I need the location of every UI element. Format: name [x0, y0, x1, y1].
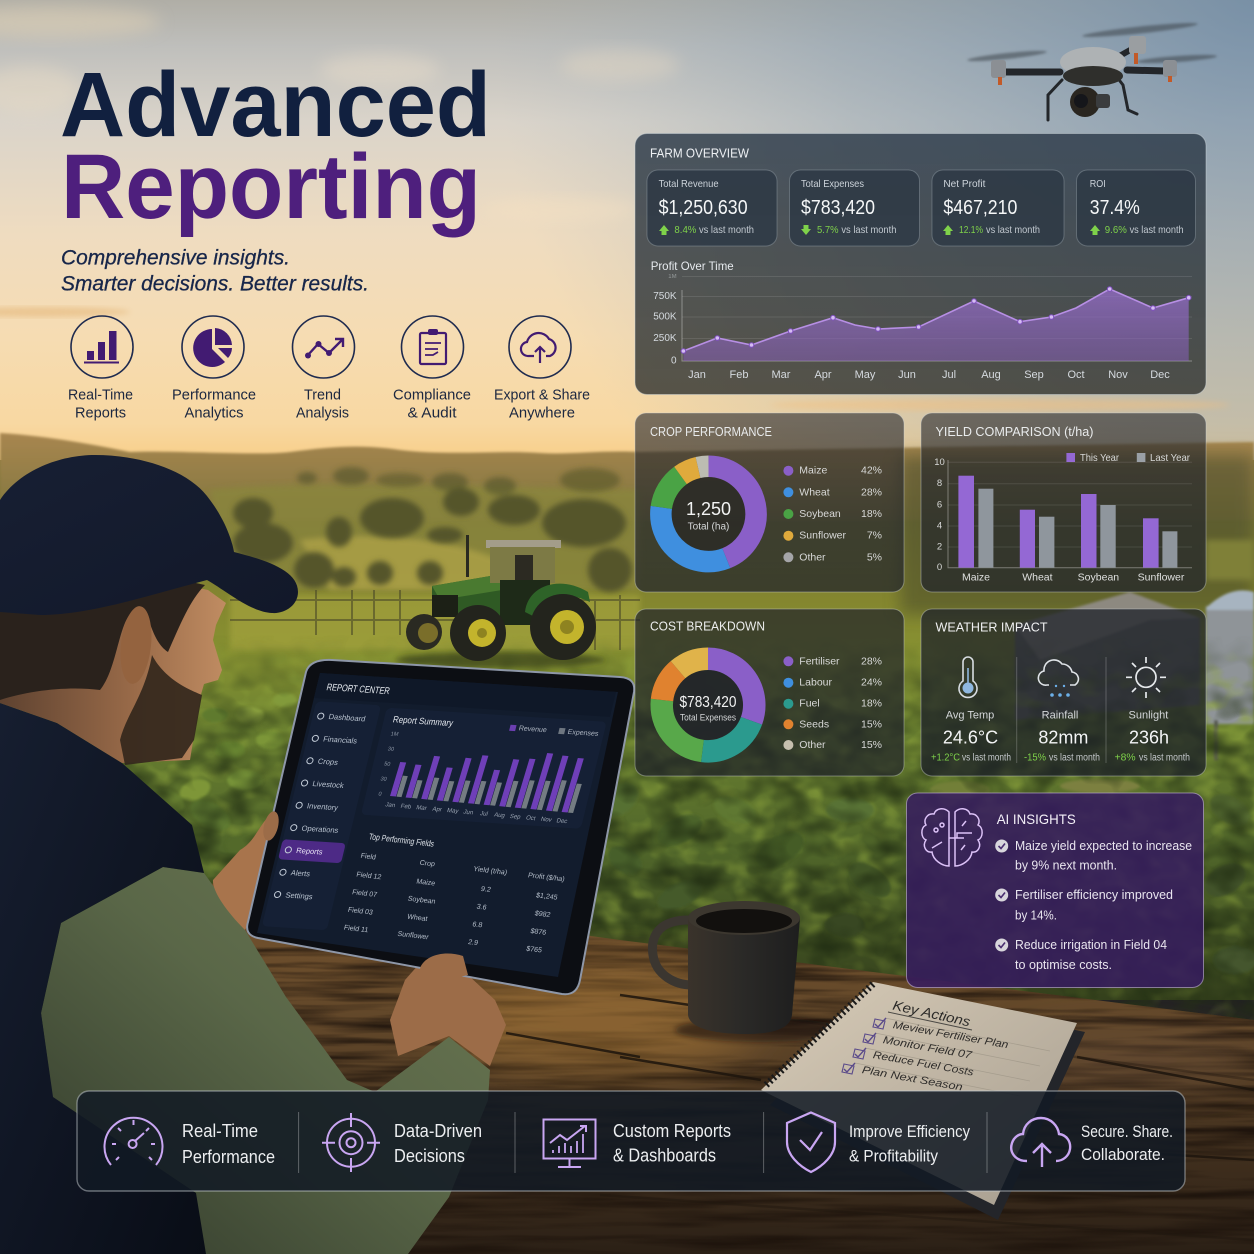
weather: rainfall: 82mm: [1038, 728, 1088, 748]
kpi: net profit: 12.1%: [959, 224, 983, 236]
kpi: total expenses: vs last month: [841, 224, 897, 236]
insight: maize yield: by 9% next month.: [1015, 858, 1117, 872]
yield bar chart: 8: [937, 478, 942, 489]
tablet: fingers over screen: [261, 810, 468, 985]
tablet: top performing fields table: $876: [530, 927, 547, 937]
drone: [967, 20, 1217, 120]
profit over time line chart: Mar: [772, 369, 791, 381]
yield legend: Last Year: [1150, 452, 1190, 464]
tablet: revenue and expenses bar chart: Jan: [384, 801, 397, 809]
benefit: custom reports and dashboards: Custom Reports: [613, 1121, 731, 1141]
panel: bottom benefits bar: [77, 1091, 1185, 1191]
kpi: total expenses: Total Expenses: [801, 178, 864, 190]
weather: sunlight: [1115, 710, 1190, 764]
profit over time line chart: Jan: [688, 369, 706, 381]
insight: reduce irrigation: to optimise costs.: [1015, 958, 1112, 972]
weather: avg temp: +1.2°C: [931, 752, 960, 764]
cost legend: Fertiliser: [799, 655, 840, 667]
kpi: total revenue: [647, 170, 777, 246]
crop legend: Soybean: [799, 508, 841, 520]
tablet: sidebar and header: 50: [383, 761, 391, 768]
yield bar chart: 0: [937, 562, 942, 573]
tablet: top performing fields table: Yield (t/ha): [473, 865, 508, 877]
kpi: total revenue: Total Revenue: [659, 178, 719, 190]
insight: maize yield: Maize yield expected to increase: [1015, 839, 1192, 853]
cost legend: [783, 655, 882, 751]
kpi: total expenses: [790, 170, 920, 246]
feature: export and share: [494, 316, 590, 422]
crop legend: Maize: [799, 465, 827, 477]
tablet: revenue and expenses bar chart: Jul: [479, 810, 489, 818]
panel: crop performance: CROP PERFORMANCE: [650, 424, 772, 439]
weather: avg temp: Avg Temp: [946, 710, 994, 722]
profit over time line chart: Feb: [730, 369, 748, 381]
panel: ai insights: [906, 793, 1204, 988]
panel: crop performance: [635, 413, 904, 592]
feature: export and share: Anywhere: [509, 404, 575, 422]
feature: real-time reports: [68, 316, 133, 422]
tablet: sidebar and header: Revenue: [518, 724, 548, 734]
tablet: top performing fields table: Maize: [416, 877, 436, 888]
background: distant hills and fields: [0, 433, 1254, 1000]
weather: avg temp: [931, 710, 1011, 764]
tablet: top performing fields table: Field 07: [351, 888, 378, 899]
title: Reporting: [61, 136, 481, 238]
weather: rainfall: -15%: [1024, 752, 1046, 764]
benefit: real-time performance: [104, 1118, 275, 1167]
farmer: baseball cap: [0, 455, 298, 615]
yield legend: [1066, 452, 1190, 464]
tablet: top performing fields table: Wheat: [406, 913, 428, 923]
yield bar chart: Soybean: [1078, 572, 1119, 584]
tablet: sidebar and header: Expenses: [567, 728, 600, 738]
tablet: top performing fields table: Field 11: [343, 924, 369, 934]
tablet: revenue and expenses bar chart: Oct: [525, 814, 537, 822]
benefit: data-driven decisions: [322, 1113, 482, 1172]
tablet: revenue and expenses bar chart: Nov: [540, 816, 554, 824]
farmer: left hand: [213, 812, 282, 930]
tablet: revenue and expenses bar chart: Jun: [462, 809, 475, 816]
tablet: report center title: REPORT CENTER: [325, 682, 391, 697]
weather: sunlight: Sunlight: [1129, 710, 1168, 722]
tablet: top performing fields table: Profit ($/ha): [527, 871, 565, 883]
tablet: screen: [257, 673, 618, 977]
tablet: top performing fields table: Soybean: [407, 895, 436, 906]
benefit: real-time performance: Real-Time: [182, 1121, 258, 1141]
cost legend: Seeds: [799, 718, 829, 730]
panel: ai insights: AI INSIGHTS: [997, 811, 1076, 827]
profit over time line chart: 1M: [668, 274, 677, 280]
notebook: key actions: Reduce Fuel Costs: [872, 1049, 975, 1079]
profit over time line chart: 750K: [653, 291, 677, 302]
feature: performance analytics: Performance: [172, 386, 256, 404]
tablet: navigation: Alerts: [290, 868, 311, 878]
benefit: improve efficiency and profitability: [787, 1112, 970, 1172]
feature: export and share: Export & Share: [494, 386, 590, 404]
cost donut chart: $783,420: [680, 694, 737, 711]
cost legend: Labour: [799, 677, 832, 689]
feature: performance analytics: [172, 316, 256, 422]
profit over time line chart: May: [855, 369, 876, 381]
farm overview heading: FARM OVERVIEW: [650, 146, 750, 160]
feature: compliance and audit: [393, 316, 471, 422]
cost legend: Other: [799, 739, 826, 751]
tablet: top performing fields table: 9.2: [480, 885, 492, 894]
notebook: key actions: [761, 982, 1085, 1220]
benefit: real-time performance: Performance: [182, 1147, 275, 1167]
profit over time heading: Profit Over Time: [651, 259, 734, 273]
notebook: key actions: Meview Fertiliser Plan: [892, 1019, 1009, 1051]
subtitle: [61, 246, 369, 296]
kpi: roi: [1076, 170, 1196, 246]
yield bar chart: 2: [937, 542, 942, 552]
weather: rainfall: vs last month: [1049, 752, 1100, 764]
insight: fertiliser efficiency: by 14%.: [1015, 908, 1057, 922]
panel: weather impact: [921, 609, 1206, 776]
tablet: revenue and expenses bar chart: Sep: [509, 813, 522, 821]
kpi: total expenses: 5.7%: [817, 224, 838, 236]
yield bar chart: [934, 457, 1192, 584]
insight: reduce irrigation: Reduce irrigation in Field 04: [1015, 938, 1167, 952]
yield bar chart: Sunflower: [1138, 572, 1185, 584]
cost donut chart: Total Expenses: [680, 712, 736, 724]
yield legend: This Year: [1080, 452, 1119, 464]
background: wooden table: [200, 882, 1254, 1254]
tablet: sidebar and header: 0: [378, 792, 382, 798]
panel: weather impact: WEATHER IMPACT: [936, 620, 1048, 634]
farmer: hair: [0, 540, 205, 700]
kpi: net profit: $467,210: [943, 197, 1017, 219]
crop donut chart: 1,250: [686, 499, 731, 519]
cost donut chart: [662, 659, 754, 751]
crop legend: [783, 465, 882, 563]
tablet: navigation: Reports: [295, 846, 324, 857]
feature: real-time reports: Reports: [75, 404, 126, 422]
profit over time line chart: [653, 274, 1192, 381]
tablet: navigation: Dashboard: [328, 712, 366, 723]
weather: sunlight: vs last month: [1139, 752, 1190, 764]
farmer: ear: [117, 605, 155, 685]
profit over time line chart: Nov: [1108, 369, 1128, 381]
tablet: sidebar and header: 30: [380, 776, 387, 783]
tablet: revenue and expenses bar chart: Apr: [431, 806, 443, 813]
tablet: sidebar and header: 30: [387, 746, 395, 753]
feature: compliance and audit: Compliance: [393, 386, 471, 404]
benefit: data-driven decisions: Decisions: [394, 1146, 465, 1166]
feature: trend analysis: [292, 316, 354, 422]
tablet: top performing fields table: $1,245: [535, 891, 559, 902]
tablet: top performing fields table: [343, 831, 571, 955]
kpi: total expenses: $783,420: [801, 197, 875, 219]
tablet: top performing fields table: $982: [534, 909, 551, 919]
panel: cost breakdown: [635, 609, 904, 776]
background: crop field: [0, 635, 1254, 1045]
icon: rain cloud: [1038, 660, 1078, 697]
farmer: vest: [0, 703, 206, 1254]
crop donut chart: [661, 466, 756, 562]
profit over time line chart: Oct: [1067, 369, 1085, 381]
insight: reduce irrigation: [995, 938, 1167, 972]
cost legend: 28%: [861, 655, 882, 667]
profit over time line chart: 0: [671, 356, 677, 366]
yield bar chart: Wheat: [1022, 572, 1053, 584]
feature: trend analysis: Analysis: [296, 404, 349, 422]
tablet: report summary card: [361, 708, 607, 829]
yield bar chart: 4: [937, 520, 942, 532]
tablet: revenue and expenses bar chart: [384, 740, 590, 825]
cost legend: 15%: [861, 739, 882, 751]
kpi: total revenue: $1,250,630: [659, 197, 748, 219]
tablet: top performing fields table: Field 12: [355, 871, 382, 881]
feature: compliance and audit: & Audit: [408, 404, 457, 422]
profit over time line chart: Sep: [1024, 369, 1044, 381]
tablet: revenue and expenses bar chart: Aug: [493, 812, 506, 819]
tablet: revenue and expenses bar chart: Dec: [556, 817, 568, 825]
kpi: roi: ROI: [1090, 178, 1106, 190]
background: fence: [230, 590, 640, 650]
tablet: top performing fields table: Crop: [419, 859, 436, 868]
tablet: navigation: Operations: [301, 824, 340, 835]
kpi: net profit: Net Profit: [943, 178, 985, 190]
tablet: navigation: Financials: [322, 734, 358, 746]
cost legend: 15%: [861, 718, 882, 730]
icon: sun: [1126, 657, 1166, 698]
cost legend: Fuel: [799, 698, 820, 710]
tablet: top performing fields table: Sunflower: [397, 930, 430, 941]
tablet: body: [247, 660, 634, 994]
weather: avg temp: vs last month: [962, 752, 1011, 764]
tablet: navigation: Crops: [317, 757, 339, 767]
insight: fertiliser efficiency: [995, 888, 1173, 922]
insight: maize yield: [995, 839, 1192, 872]
crop legend: Wheat: [799, 486, 830, 498]
kpi: net profit: vs last month: [986, 224, 1040, 236]
tablet: top performing fields table: 3.6: [476, 903, 487, 912]
profit over time line chart: Apr: [814, 369, 832, 381]
kpi: net profit: [932, 170, 1064, 246]
farmer: neck and face: [0, 560, 226, 763]
weather: sunlight: +8%: [1115, 752, 1136, 764]
panel: cost breakdown: COST BREAKDOWN: [650, 618, 765, 634]
cost legend: 24%: [861, 677, 882, 689]
benefit: improve efficiency and profitability: & Profitability: [849, 1146, 938, 1166]
benefit: custom reports and dashboards: & Dashboards: [613, 1146, 716, 1166]
crop legend: 18%: [861, 508, 882, 520]
benefit: secure share collaborate: Collaborate.: [1081, 1146, 1165, 1164]
profit over time line chart: Jul: [942, 369, 956, 381]
crop donut chart: Total (ha): [688, 522, 729, 532]
tablet: top performing fields table: $765: [525, 945, 543, 954]
benefit: secure share collaborate: Secure. Share.: [1081, 1123, 1173, 1141]
tablet: top performing fields table: 6.8: [472, 920, 483, 929]
profit over time line chart: 500K: [653, 312, 677, 322]
kpi: roi: 37.4%: [1090, 197, 1140, 219]
tablet: navigation: [273, 711, 367, 902]
farmer: right hand: [390, 954, 506, 1066]
kpi: roi: vs last month: [1130, 224, 1184, 236]
tablet: sidebar and header: Report Summary: [392, 714, 455, 728]
crop legend: 28%: [861, 486, 882, 498]
profit over time line chart: Dec: [1150, 369, 1170, 381]
tablet: top performing fields table: 2.9: [467, 938, 479, 947]
feature: trend analysis: Trend: [304, 386, 341, 404]
weather: rainfall: Rainfall: [1042, 710, 1078, 722]
benefit: custom reports and dashboards: [544, 1120, 731, 1167]
yield bar chart: Maize: [962, 572, 990, 584]
notebook: key actions: Key Actions: [891, 998, 972, 1029]
farmer: beard: [120, 655, 202, 765]
feature: performance analytics: Analytics: [184, 404, 244, 422]
profit over time line chart: 250K: [653, 333, 677, 344]
tablet: top performing fields table: Field: [360, 852, 377, 862]
profit over time line chart: Aug: [981, 369, 1001, 381]
crop legend: 42%: [861, 465, 882, 477]
notebook: key actions: Monitor Field 07: [882, 1034, 974, 1062]
crop legend: 5%: [867, 551, 882, 563]
tractor: [395, 535, 605, 668]
panel: yield comparison: [921, 413, 1206, 592]
tablet: navigation: Settings: [284, 891, 314, 901]
subtitle: Smarter decisions. Better results.: [61, 272, 369, 296]
panel: farm overview: [635, 134, 1206, 394]
yield bar chart: 6: [937, 500, 942, 510]
farmer: sleeve and shirt: [41, 867, 490, 1254]
tablet: active reports item: [278, 839, 346, 863]
notebook: key actions: Plan Next Season: [861, 1064, 964, 1094]
tablet: sidebar and header: 1M: [390, 731, 399, 738]
background: sky: [0, 0, 1254, 470]
title: [60, 54, 491, 238]
title: Advanced: [60, 54, 491, 156]
background: barn and silo: [1015, 590, 1254, 760]
weather: avg temp: 24.6°C: [943, 728, 998, 748]
tablet: revenue and expenses bar chart: May: [446, 807, 460, 815]
profit over time line chart: Jun: [898, 369, 916, 381]
panel: yield comparison: YIELD COMPARISON (t/ha): [936, 424, 1094, 439]
cost legend: 18%: [861, 698, 882, 710]
benefit: improve efficiency and profitability: Improve Efficiency: [849, 1122, 970, 1141]
tablet: revenue and expenses bar chart: Feb: [400, 803, 413, 811]
farmer figure: [0, 455, 506, 1254]
crop legend: Sunflower: [799, 530, 846, 542]
weather: rainfall: [1024, 710, 1100, 764]
benefit: secure share collaborate: [1011, 1118, 1173, 1167]
tablet: revenue and expenses bar chart: Mar: [415, 804, 428, 812]
tablet: navigation: Inventory: [306, 801, 339, 812]
tablet: top performing fields table: Field 03: [347, 906, 374, 917]
crop legend: 7%: [867, 530, 882, 542]
yield bar chart: 10: [934, 457, 945, 468]
kpi: total revenue: 8.4%: [674, 224, 696, 236]
tablet: navigation: Livestock: [311, 779, 345, 790]
tablet: top performing fields table: Top Performing Fields: [368, 831, 435, 849]
insight: fertiliser efficiency: Fertiliser efficiency improved: [1015, 888, 1173, 902]
kpi: roi: 9.6%: [1105, 224, 1127, 236]
tablet: [247, 660, 634, 994]
icon: thermometer: [959, 657, 977, 697]
subtitle: Comprehensive insights.: [61, 246, 290, 270]
benefit: data-driven decisions: Data-Driven: [394, 1121, 482, 1141]
kpi: total revenue: vs last month: [699, 224, 754, 236]
crop legend: Other: [799, 551, 826, 563]
weather: sunlight: 236h: [1129, 728, 1169, 748]
icon: brain: [922, 809, 982, 866]
tablet: sidebar and header: [259, 673, 616, 945]
coffee mug: [652, 901, 845, 1042]
background: tree line: [233, 467, 632, 592]
feature: real-time reports: Real-Time: [68, 386, 133, 404]
